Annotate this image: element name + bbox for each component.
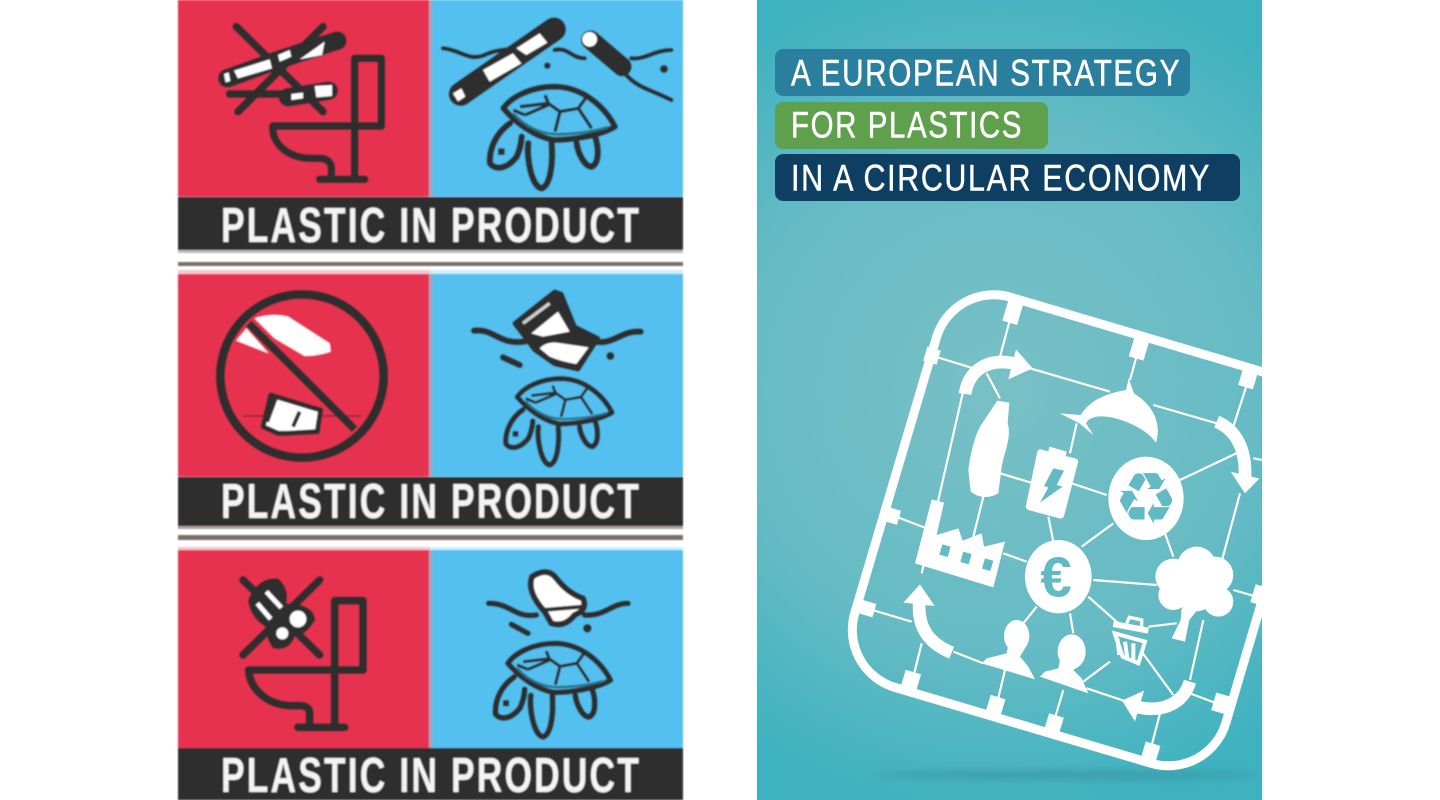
divider panel 3 (429, 550, 432, 748)
arrow: top right (1217, 422, 1259, 493)
icon: turtle (490, 87, 615, 188)
separator stripes 2 (178, 526, 683, 550)
red panel 2 (178, 274, 429, 477)
panel: plastic in product column (178, 0, 683, 800)
label text 2: PLASTIC IN PRODUCT (221, 475, 641, 529)
separator stripes 1 (178, 250, 683, 274)
icon: tree (1155, 547, 1233, 642)
icon: large cotton bud in water (443, 29, 671, 101)
icon: toilet (273, 58, 381, 179)
icon: man silhouette (982, 620, 1035, 679)
title line 3: IN A CIRCULAR ECONOMY (791, 158, 1211, 198)
title line 2: FOR PLASTICS (791, 104, 1023, 146)
panel: European strategy cover (757, 0, 1262, 800)
icon: prohibition sign with plastic (220, 294, 384, 458)
blue panel 1 (432, 0, 683, 197)
icon: turtle (495, 643, 611, 737)
connecting runners and tabs (859, 297, 1270, 764)
sprue frame (848, 290, 1262, 770)
label text 1: PLASTIC IN PRODUCT (221, 199, 641, 253)
blue panel 3 (432, 550, 683, 748)
icon: trash bin (1113, 617, 1148, 663)
icon: toilet (249, 601, 363, 727)
ground shadow (870, 770, 1260, 780)
icon: dolphin (1060, 378, 1158, 443)
title (775, 49, 1240, 201)
arrow: top left (965, 349, 1033, 394)
title line 1 background (775, 49, 1190, 96)
red panel 3 (178, 550, 429, 748)
title line 3 background (775, 154, 1240, 201)
red panel 1 (178, 0, 429, 197)
icon: euro coin: € (1040, 547, 1072, 610)
icon: plastic cup in water (474, 292, 641, 369)
blue panel 2 (432, 274, 683, 477)
icon: battery (1026, 447, 1078, 519)
icon: crossed-out cotton buds (224, 27, 337, 112)
label bar 3 (178, 748, 683, 800)
panel: wet wipes and cups (178, 274, 683, 477)
title line 2 background (775, 102, 1048, 149)
circular economy kit graphic (859, 297, 1270, 764)
icon: euro coin (1025, 540, 1092, 613)
divider panel 1 (429, 0, 432, 197)
arrow: bottom left (903, 584, 952, 653)
title line 1: A EUROPEAN STRATEGY (791, 52, 1181, 94)
arrow: bottom right (1122, 682, 1190, 721)
icon: woman silhouette (1040, 634, 1088, 693)
label bar 2 (178, 477, 683, 526)
cover background (757, 0, 1262, 800)
icon: turtle (506, 379, 612, 465)
panel: microplastics and fragments (178, 550, 683, 748)
divider panel 2 (429, 274, 432, 477)
icon: recycling symbol: ♻ (1114, 456, 1178, 540)
icon: fragment in water (489, 572, 628, 633)
icon: bottle (968, 401, 1009, 497)
icon: factory (915, 499, 1005, 587)
icon: crossed-out fragments (243, 578, 320, 655)
label bar 1 (178, 197, 683, 250)
panel: cotton buds and wipes (178, 0, 683, 197)
